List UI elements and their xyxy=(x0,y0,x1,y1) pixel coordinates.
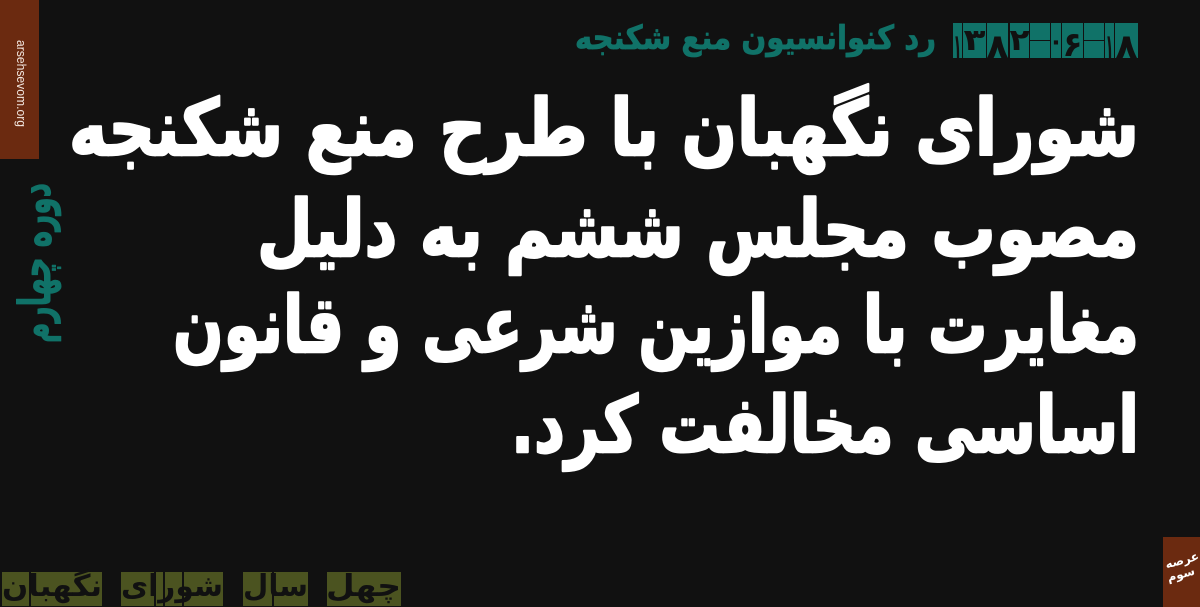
subtitle: رد کنوانسیون منع شکنجه xyxy=(575,18,936,58)
logo block: عرصه xyxy=(1163,549,1200,571)
date blocks: ۰ xyxy=(1049,27,1063,55)
date blocks: ۳ xyxy=(964,23,986,58)
date blocks xyxy=(953,23,1138,67)
date blocks: ۶ xyxy=(1062,25,1082,65)
side tab: website label: arsehsevom.org xyxy=(14,40,29,127)
date blocks: ۲ xyxy=(1010,23,1030,58)
date blocks: ۱ xyxy=(954,27,962,67)
bottom title blocks: شورای xyxy=(121,569,223,604)
logo block xyxy=(1163,537,1200,607)
date blocks: ۸ xyxy=(1116,27,1138,67)
date blocks: ۸ xyxy=(986,27,1009,67)
logo block: سوم xyxy=(1166,564,1197,586)
main headline xyxy=(69,84,1139,471)
bottom title blocks: چهل xyxy=(326,569,401,604)
bottom title blocks xyxy=(2,568,401,606)
date blocks: ۱ xyxy=(1106,27,1114,67)
bottom title blocks: نگهبان xyxy=(2,568,102,604)
side tab: website label xyxy=(0,0,39,159)
vertical label: period: دوره چهارم xyxy=(10,183,61,343)
bottom title blocks: سال xyxy=(243,569,308,604)
